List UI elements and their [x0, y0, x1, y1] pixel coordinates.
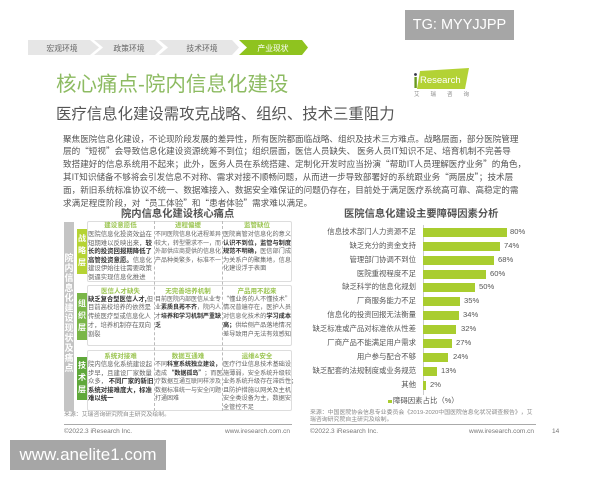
bar row 7: 信息化的投资回报无法衡量: [327, 310, 416, 319]
bar 50%: [423, 283, 475, 292]
value 34%: 34%: [463, 310, 478, 319]
bar 24%: [423, 353, 448, 362]
label: technology layer: [77, 357, 87, 400]
bar row 9: 厂商产品不能满足用户需求: [327, 338, 416, 347]
strategy text: differences: 较大，转型需求不一，而: [155, 238, 221, 246]
strategy text: differences: [155, 221, 221, 264]
organization text: talent: 缺乏复合型医信人才,但: [88, 294, 153, 302]
bar row 4: 医院重视程度不足: [357, 268, 416, 278]
footer right: www.iresearch.com.cn: [469, 428, 534, 435]
bar row 6: 厂商服务能力不足: [357, 296, 416, 305]
strategy text: supervision: 认识不到位，监管与制度: [223, 238, 291, 246]
body paragraph: [63, 132, 526, 209]
footer right: 14: [552, 428, 559, 435]
organization text: training: 才培养和学习机制严重缺: [155, 311, 221, 320]
navigation tabs: 产业现状: [257, 43, 289, 53]
strategy text: differences: 产品种类繁多，标准不一: [155, 254, 221, 264]
label: organization layer: [77, 293, 87, 340]
body paragraph: 求满足程度阶段，对“员工体验”和“患者体验”需求难以满足。: [63, 197, 312, 209]
strategy text: differences: 不同医院信息化进程差异: [155, 229, 221, 238]
panel: strategy row: [87, 221, 292, 282]
bar row 5: 缺乏科学的信息化规划: [342, 282, 416, 291]
logo: iResearch: [414, 68, 480, 98]
watermark: website: [10, 440, 166, 470]
footer right: ©2022.3 iResearch Inc.: [310, 428, 378, 435]
value 35%: 35%: [464, 296, 479, 305]
value 68%: 68%: [498, 254, 513, 264]
chart legend: 障碍因素占比（%）: [393, 396, 459, 405]
bar 2%: [423, 380, 426, 390]
label: strategy layer: [77, 229, 87, 274]
title: 核心痛点-院内信息化建设: [56, 73, 288, 96]
organization text: adoption: “懂业务的人不懂技术”: [223, 294, 291, 302]
technology text: data: 不同科室系统独立建设，: [155, 359, 221, 368]
technology text: data: 疗数据互通互联同样涉及: [155, 376, 221, 385]
watermark: website: www.anelite1.com: [19, 445, 156, 464]
organization text: adoption: 产品用不起来: [238, 288, 276, 295]
strategy text: supervision: 为关系户的聚集地，信息: [223, 254, 291, 264]
value 74%: 74%: [504, 241, 519, 250]
technology text: data: 数据标准统一与安全问题: [155, 385, 221, 394]
organization text: adoption: [223, 288, 291, 338]
value 32%: 32%: [461, 324, 476, 333]
right source note: [310, 408, 533, 423]
bar row 3: 管理部门协调不到位: [349, 254, 416, 264]
organization text: talent: 割裂: [88, 329, 101, 338]
strategy text: budget: [88, 221, 152, 280]
organization text: adoption: 情况普遍存在，医护人员: [223, 302, 291, 311]
strategy text: budget: 长的投资回报期降低了: [88, 246, 152, 255]
technology text: operations: 医疗行业信息技术基础设: [223, 359, 291, 368]
organization text: talent: 才，培养机制存在双向: [88, 320, 151, 329]
label: technology layer: 技术层: [78, 361, 86, 394]
bar row 10: 用户参与配合不够: [357, 352, 416, 361]
bar row 12: 其他: [401, 380, 416, 388]
bar row 1: 信息技术部门人力资源不足: [327, 227, 416, 236]
value 27%: 27%: [456, 338, 471, 347]
footer right: [310, 424, 560, 436]
logo: iResearch: Research: [420, 75, 461, 86]
bar chart: [423, 225, 424, 395]
technology text: data: 打通困难: [155, 393, 179, 402]
organization text: training: [155, 287, 221, 329]
strategy text: budget: 建设伊始往往需要政策: [88, 263, 152, 272]
watermark: TG: [405, 10, 514, 40]
technology text: operations: 运维&安全: [242, 353, 272, 360]
strategy text: supervision: 规范不明确，医信部门成: [223, 246, 291, 255]
left vertical bar: [64, 222, 74, 411]
strategy text: budget: 高管投资意愿。信息化: [88, 254, 152, 264]
body paragraph: 面，新旧系统标准协议不统一、数据难接入、数据安全难保证的问题仍存在，目前处于满足医疗系统高可靠、高稳定的需: [63, 184, 518, 196]
strategy text: differences: 外部供应商提供的信息化: [155, 246, 221, 255]
bar 74%: [423, 242, 500, 251]
organization text: training: 乏: [155, 320, 161, 329]
bar row 2: 缺乏充分的资金支持: [349, 241, 416, 250]
technology text: docking: 难以统一: [88, 393, 114, 402]
technology text: data: 数据互通难: [172, 353, 204, 360]
technology text: operations: 全管控不足: [223, 402, 254, 411]
technology text: operations: 安全类设备为主，数据安: [223, 393, 291, 402]
technology text: docking: [88, 352, 153, 402]
organization text: talent: 传统医疗型或信息化人: [88, 311, 151, 320]
organization text: adoption: 高；供给侧产品落地情况: [223, 320, 291, 329]
logo: iResearch: 艾瑞咨询: [414, 92, 480, 98]
technology text: docking: 系统对接难: [104, 353, 137, 360]
organization text: training: 无完善培养机制: [165, 288, 211, 295]
navigation tabs: 宏观环境: [46, 43, 78, 53]
organization text: adoption: 差导致用户无法有效感知: [223, 329, 291, 338]
strategy text: supervision: 医院高管对信息化的意义: [223, 229, 291, 238]
value 80%: 80%: [510, 227, 525, 236]
value 2%: 2%: [430, 380, 441, 388]
right source note: 来源：中国医院协会信息专业委员会《2019-2020中国医院信息化状况调查报告》，艾: [310, 410, 533, 416]
value 24%: 24%: [453, 352, 468, 361]
bar 27%: [423, 339, 452, 348]
subtitle: 医疗信息化建设需攻克战略、组织、技术三重阻力: [56, 106, 395, 123]
left vertical bar: 院内信息化建设现状及痛点: [64, 253, 74, 373]
panel: technology row: [87, 350, 292, 411]
strategy text: differences: 进程偏缓: [175, 222, 201, 229]
technology text: data: [155, 352, 222, 402]
navigation tabs: [28, 40, 308, 55]
organization text: talent: 目前高校培养的依然是: [88, 302, 151, 311]
technology text: docking: 众多， 不同厂家的新旧: [88, 376, 153, 385]
left source note: 来源：艾瑞咨询研究院自主研究及绘制。: [64, 412, 170, 418]
bar 13%: [423, 366, 437, 376]
organization text: adoption: 对信息化技术的学习成本: [223, 311, 291, 320]
bar 34%: [423, 311, 459, 320]
footer left: www.iresearch.com.cn: [225, 428, 290, 435]
value 60%: 60%: [490, 268, 505, 278]
organization text: talent: [88, 288, 153, 338]
value 13%: 13%: [441, 366, 456, 374]
strategy text: budget: 短期难以反映出来，较: [88, 238, 152, 246]
technology text: operations: [223, 352, 297, 411]
strategy text: supervision: 化建设浮于表面: [223, 263, 266, 272]
organization text: training: 业素质良莠不齐，院内人: [155, 302, 221, 311]
bar 60%: [423, 270, 486, 278]
technology text: operations: 施薄弱，安全系统升级较: [223, 368, 291, 377]
left panel heading: 院内信息化建设核心痛点: [121, 209, 234, 220]
bar row 11: 缺乏配套的法规制度或业务规范: [313, 366, 416, 374]
strategy text: supervision: 监管缺位: [244, 222, 270, 229]
body paragraph: 层的“短视”会导致信息化建设资源统筹不到位；组织层面，医信人员缺失、 医务人员IT知识不足、培育机制不完善导: [63, 145, 511, 157]
bar 35%: [423, 297, 460, 306]
bar 68%: [423, 256, 494, 264]
navigation tabs: 技术环境: [186, 43, 218, 53]
strategy text: budget: 医院信息化投资效益在: [88, 229, 152, 238]
technology text: data: 造成 “数据孤岛”；而医: [155, 368, 222, 377]
body paragraph: 聚焦医院信息化建设，不论现阶段发展的差异性，所有医院都面临战略、组织及技术三方难点。战略层面，部分医院管理: [63, 132, 518, 144]
strategy text: budget: 倒逼实现信息化推进: [88, 272, 146, 280]
value 50%: 50%: [479, 282, 494, 291]
label: organization layer: 组织层: [78, 299, 86, 332]
technology text: docking: 步早，且建设厂家数量: [88, 368, 152, 377]
label: strategy layer: 战略层: [78, 234, 86, 267]
technology text: operations: 且防护措施以网关及主机: [223, 385, 291, 394]
right panel heading: 医院信息化建设主要障碍因素分析: [344, 209, 498, 220]
watermark: TG: TG: MYYJJPP: [413, 17, 506, 33]
navigation tabs: 政策环境: [113, 43, 145, 53]
footer left: [64, 424, 292, 436]
technology text: operations: 业务系统升级存在滞后性；: [223, 376, 297, 385]
bar 80%: [423, 228, 507, 237]
body paragraph: 其IT知识储备不够将会引发信息不对称、需求对接不顺畅问题，从而进一步导致部署好的系统跟业务“两层皮”；技术层: [63, 171, 513, 183]
footer left: ©2022.3 iResearch Inc.: [64, 428, 132, 435]
panel: organization row: [87, 285, 292, 346]
bar 32%: [423, 325, 456, 334]
organization text: training: 目前医院内部医信从业专: [155, 294, 221, 302]
bar row 8: 缺乏标准或产品对标准依从性差: [313, 324, 416, 333]
right source note: 瑞咨询研究院自主研究及绘制。: [310, 417, 392, 423]
technology text: docking: 院内信息化系统建设起: [88, 359, 152, 368]
strategy text: supervision: [223, 221, 291, 272]
strategy text: budget: 建设意愿低: [104, 222, 137, 229]
body paragraph: 致搭建好的信息系统用不起来；此外，医务人员在系统搭建、定制化开发时应当扮演“帮助IT人员理解医疗业务”的角色，: [63, 158, 526, 170]
technology text: docking: 系统对接难度大，标准: [88, 385, 152, 394]
organization text: talent: 医信人才缺失: [101, 288, 140, 295]
